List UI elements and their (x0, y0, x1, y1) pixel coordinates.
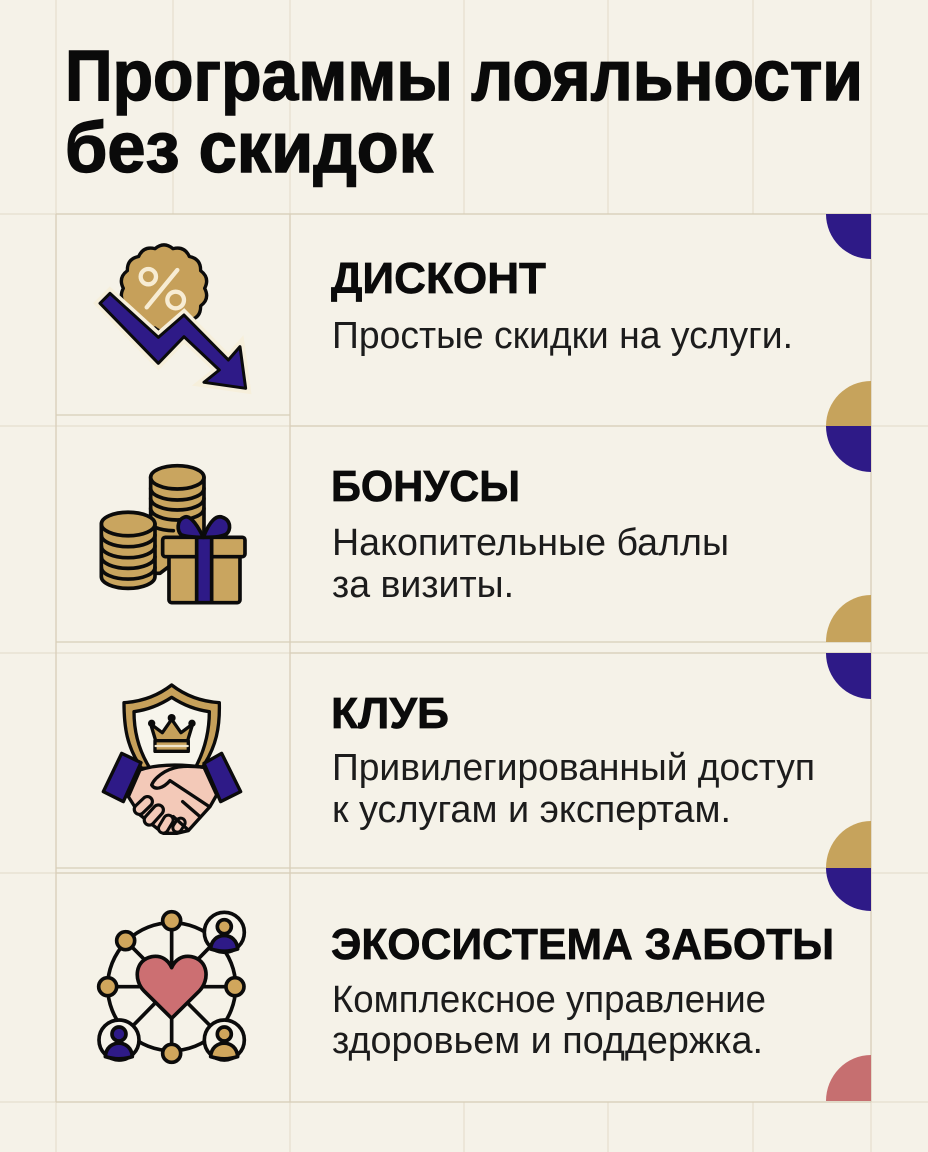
description: care ecosystem (332, 979, 766, 1062)
title (65, 37, 863, 188)
description: bonuses (332, 522, 729, 606)
description: discount: Простые скидки на услуги. (332, 315, 793, 357)
heading: discount: ДИСКОНТ (331, 254, 546, 303)
title: без скидок (65, 109, 433, 188)
description: care ecosystem: здоровьем и поддержка. (332, 1020, 763, 1062)
description: club: к услугам и экспертам. (332, 789, 731, 831)
panel: care ecosystem (99, 912, 834, 1062)
title: Программы лояльности (65, 37, 863, 116)
icon: heart network (99, 912, 244, 1062)
description: club: Привилегированный доступ (332, 747, 815, 789)
icon: discount badge with falling arrow (100, 245, 246, 388)
panel: club (103, 685, 815, 833)
description: care ecosystem: Комплексное управление (332, 979, 766, 1021)
heading: bonuses: БОНУСЫ (331, 462, 520, 511)
description: club (332, 747, 815, 831)
panel: discount (100, 245, 793, 388)
panel: bonuses (101, 462, 729, 606)
description: bonuses: за визиты. (332, 564, 514, 606)
heading: club: КЛУБ (331, 689, 449, 738)
icon: coins and gift (101, 466, 245, 603)
decorative half circles on right edge (826, 214, 871, 1101)
heading: care ecosystem: ЭКОСИСТЕМА ЗАБОТЫ (331, 920, 834, 969)
description: bonuses: Накопительные баллы (332, 522, 729, 564)
icon: shield with crown and handshake (103, 685, 241, 833)
